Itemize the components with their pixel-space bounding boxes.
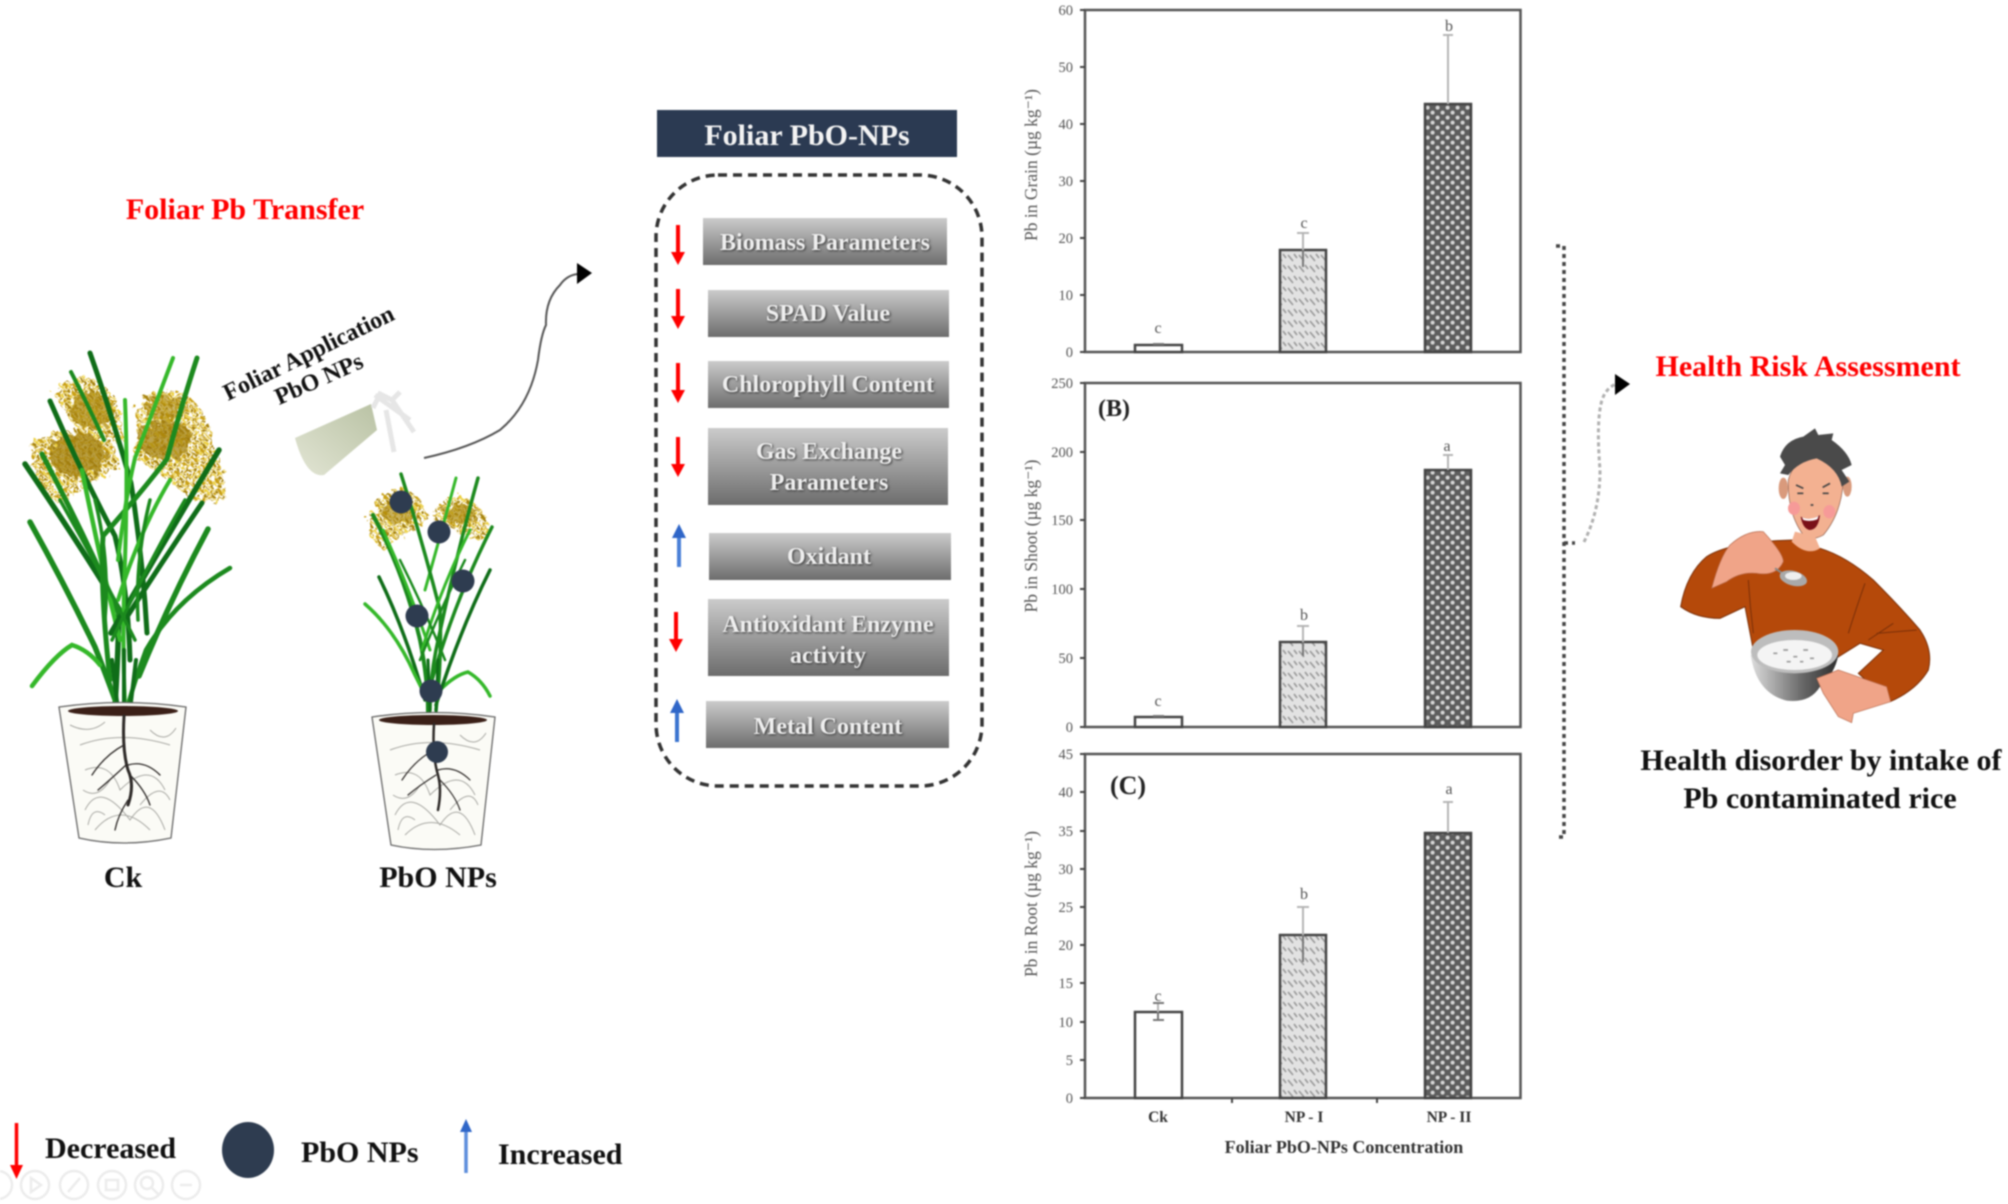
chart A: Pb in Grain: 20 (1058, 231, 1073, 247)
PbO nanoparticles on plant (390, 490, 474, 763)
chart A: Pb in Grain: 60 (1058, 3, 1073, 19)
chart A: Pb in Grain: c (1154, 320, 1162, 337)
chart A: Pb in Grain: 0 (1066, 345, 1073, 361)
row: Metal Content (670, 699, 949, 748)
legend: increased (460, 1119, 623, 1173)
chart B: Pb in Shoot: 150 (1051, 513, 1073, 529)
arrow: spray to effects panel (424, 263, 592, 458)
hair (1780, 428, 1852, 487)
row: SPAD Value (671, 289, 949, 337)
ears (1779, 478, 1788, 499)
chart C: Pb in Root: NP - I (1285, 1109, 1323, 1126)
caption: health disorder: Pb contaminated rice (1683, 782, 1957, 815)
chart C: Pb in Root: c (1154, 988, 1162, 1005)
panel heading: Foliar PbO-NPs (657, 110, 957, 157)
legend (10, 1119, 623, 1179)
legend: decreased (10, 1123, 176, 1179)
chart B: Pb in Shoot: 200 (1051, 445, 1073, 461)
chart C: Pb in Root: 10 (1058, 1015, 1073, 1031)
chart A: Pb in Grain (1021, 3, 1520, 361)
chart C: Pb in Root: (C) (1110, 771, 1146, 800)
spoon (1775, 568, 1809, 589)
label: PbO NPs: PbO NPs (379, 861, 497, 894)
row: Antioxidant Enzyme activity: Antioxidant Enzyme (722, 612, 934, 638)
panicles: treated (369, 488, 490, 548)
chart C: Pb in Root: 0 (1066, 1091, 1073, 1107)
row: Biomass Parameters (671, 218, 947, 265)
chart C: Pb in Root: a (1445, 781, 1453, 798)
pot: treated (372, 712, 495, 850)
label: Ck: Ck (104, 861, 142, 894)
chart B: Pb in Shoot: b (1300, 607, 1308, 624)
chart C: Pb in Root: 15 (1058, 976, 1073, 992)
row: Chlorophyll Content: Chlorophyll Content (722, 372, 934, 398)
chart B: Pb in Shoot: 0 (1066, 720, 1073, 736)
row: Gas Exchange Parameters: Parameters (770, 470, 888, 496)
chart B: Pb in Shoot: 50 (1058, 651, 1073, 667)
chart A: Pb in Grain: b (1445, 18, 1453, 35)
arrow: charts to health risk (1584, 374, 1630, 542)
legend: decreased: Decreased (45, 1132, 176, 1165)
label: foliar application: PbO NPs (271, 349, 367, 411)
chart C: Pb in Root: 25 (1058, 900, 1073, 916)
icon: spray bottle (295, 392, 414, 475)
panel heading: Foliar PbO-NPs: Foliar PbO-NPs (704, 119, 910, 152)
chart C: Pb in Root: 40 (1058, 785, 1073, 801)
leaves: treated (365, 474, 492, 715)
chart C: Pb in Root: Ck (1148, 1109, 1168, 1126)
raised hand (1712, 531, 1783, 588)
row: Oxidant: Oxidant (787, 544, 871, 570)
chart A: Pb in Grain: 50 (1058, 60, 1073, 76)
row: Gas Exchange Parameters: Gas Exchange (756, 439, 902, 465)
icon: person eating rice (1681, 428, 1930, 723)
chart A: Pb in Grain: 30 (1058, 174, 1073, 190)
title: Foliar Pb Transfer: Foliar Pb Transfer (126, 193, 364, 226)
chart A: Pb in Grain: 10 (1058, 288, 1073, 304)
plant: PbO NP treated rice in pot (365, 474, 495, 850)
chart B: Pb in Shoot: a (1443, 438, 1451, 455)
chart B: Pb in Shoot: 250 (1051, 376, 1073, 392)
face details (1788, 483, 1835, 530)
bracket: dotted connector around charts (1555, 246, 1575, 837)
chart B: Pb in Shoot: (B) (1098, 396, 1130, 422)
chart B: Pb in Shoot: c (1154, 693, 1162, 710)
chart A: Pb in Grain: Pb in Grain (µg kg⁻¹) (1021, 89, 1041, 241)
legend: increased: Increased (498, 1138, 623, 1171)
heading: Health Risk Assessment: Health Risk Assessment (1655, 350, 1961, 383)
row: Gas Exchange Parameters (671, 428, 948, 505)
leaves: control (25, 353, 230, 710)
label: foliar application: Foliar Application (219, 301, 399, 406)
chart C: Pb in Root: Pb in Root (µg kg⁻¹) (1021, 831, 1041, 977)
chart A: Pb in Grain: c (1300, 215, 1308, 232)
pot: control (59, 702, 186, 843)
row: Antioxidant Enzyme activity: activity (790, 643, 866, 669)
chart C: Pb in Root: 20 (1058, 938, 1073, 954)
row: Oxidant (672, 524, 951, 580)
chart A: Pb in Grain: 40 (1058, 117, 1073, 133)
chart C: Pb in Root: 5 (1066, 1053, 1073, 1069)
chart C: Pb in Root: 35 (1058, 824, 1073, 840)
sweater (1681, 540, 1930, 702)
row: Chlorophyll Content (671, 361, 949, 408)
panicles: control (31, 378, 226, 505)
bowl of rice (1751, 630, 1838, 701)
panel: effects of foliar PbO-NPs (656, 175, 982, 786)
chart C: Pb in Root: 30 (1058, 862, 1073, 878)
legend: PbO NPs (222, 1122, 419, 1178)
row: Biomass Parameters: Biomass Parameters (720, 230, 930, 256)
chart C: Pb in Root: 45 (1058, 747, 1073, 763)
chart B: Pb in Shoot: Pb in Shoot (µg kg⁻¹) (1021, 459, 1041, 612)
chart C: Pb in Root: Foliar PbO-NPs Concentration (1225, 1137, 1463, 1157)
row: SPAD Value: SPAD Value (766, 301, 890, 327)
lower hand (1817, 670, 1891, 723)
chart B: Pb in Shoot: 100 (1051, 582, 1073, 598)
chart C: Pb in Root: b (1300, 886, 1308, 903)
row: Antioxidant Enzyme activity (669, 599, 949, 676)
legend: PbO NPs: PbO NPs (301, 1136, 419, 1169)
chart B: Pb in Shoot (1021, 376, 1520, 736)
chart C: Pb in Root: NP - II (1427, 1109, 1471, 1126)
plant: control rice in pot (25, 353, 230, 843)
head (1788, 457, 1843, 538)
row: Metal Content: Metal Content (754, 714, 902, 740)
caption: health disorder: Health disorder by intake of (1640, 744, 2003, 777)
chart C: Pb in Root (1021, 747, 1520, 1157)
faded viewer toolbar icons (0, 1171, 200, 1199)
caption: health disorder (1640, 744, 2003, 815)
